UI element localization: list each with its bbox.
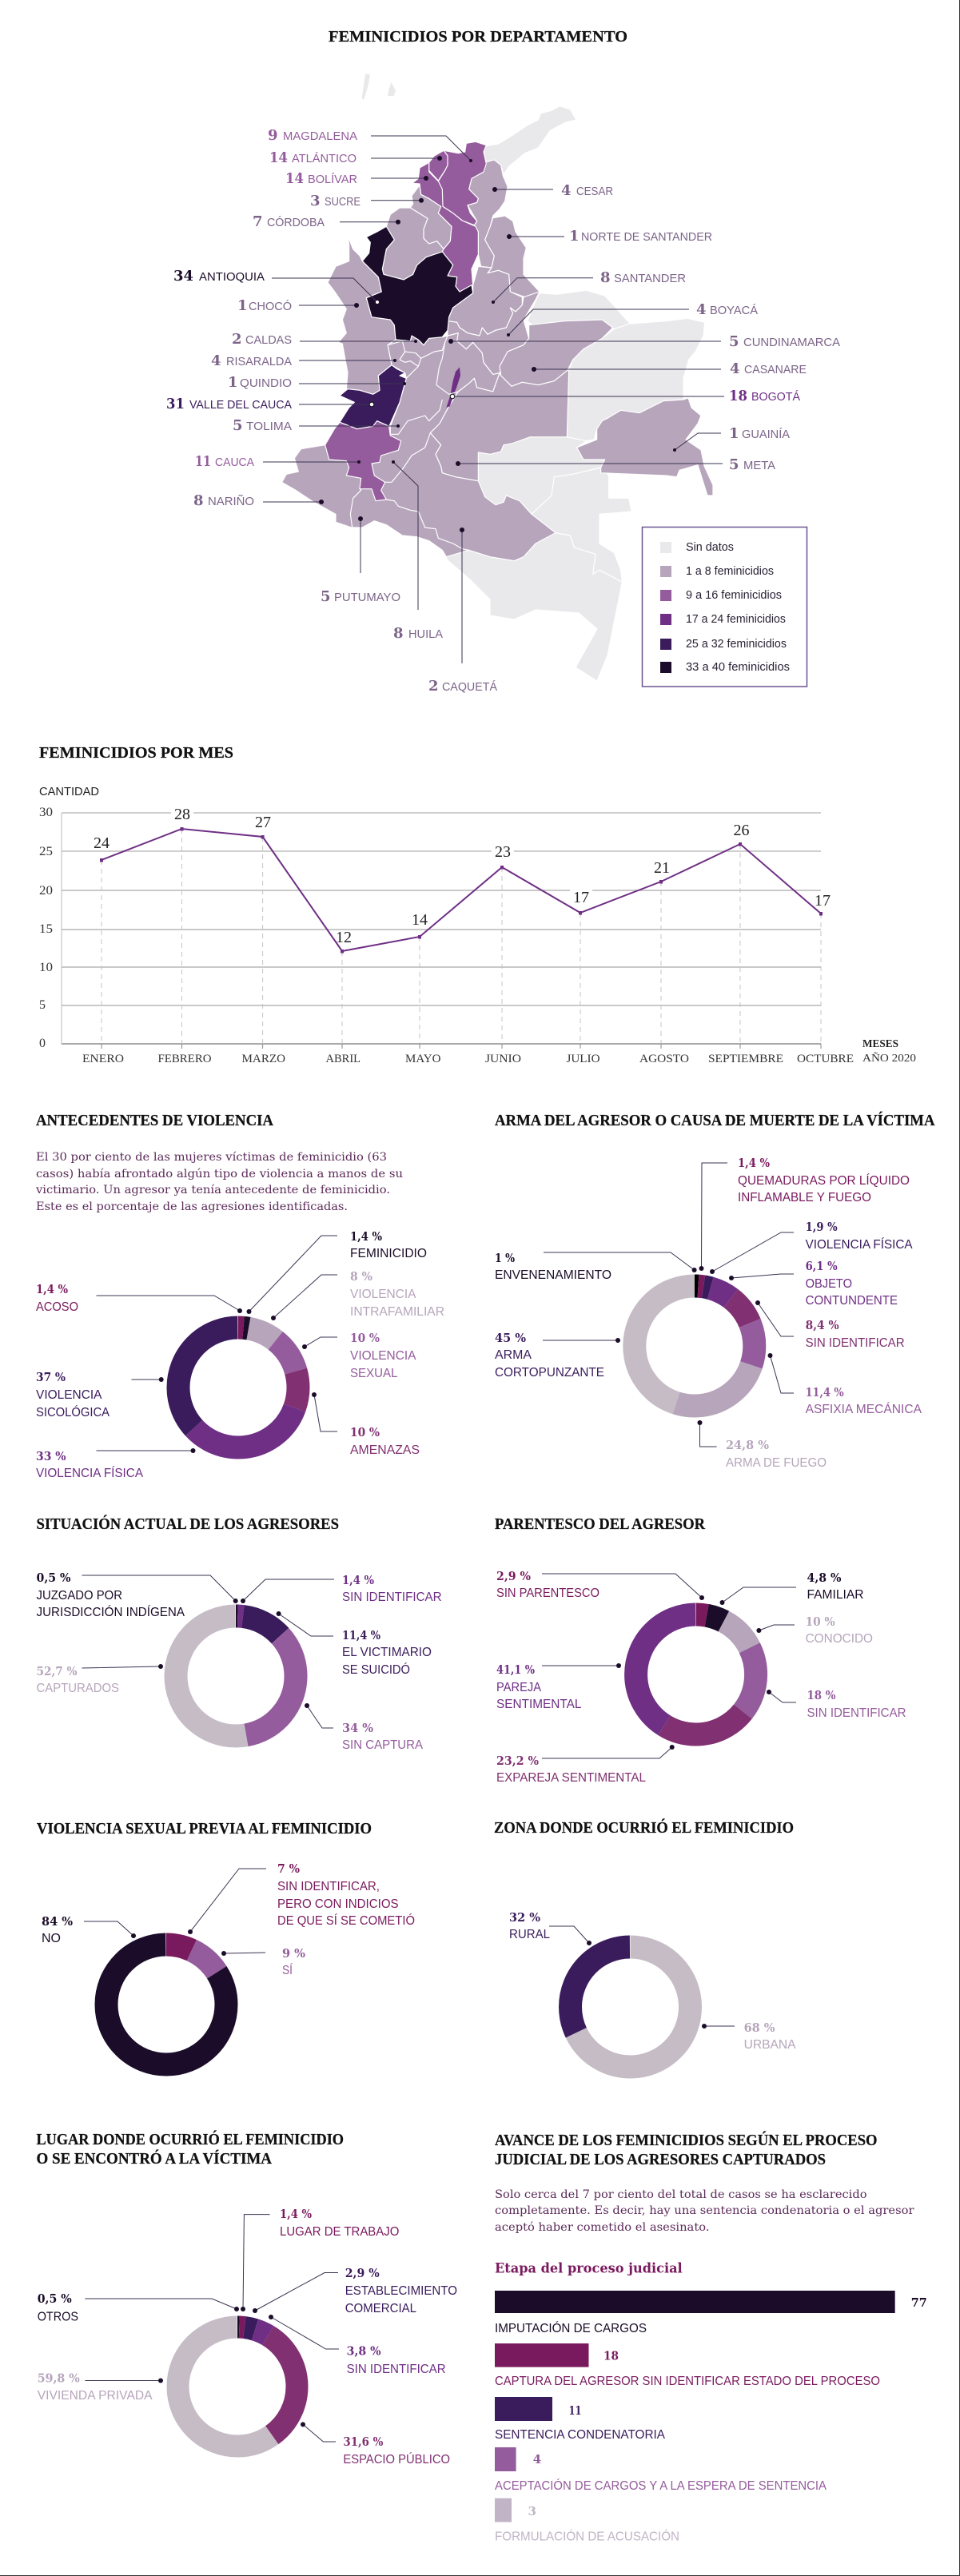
donut chart <box>177 2327 297 2446</box>
map labels: departments: CESAR <box>576 185 613 198</box>
intro paragraph: Solo cerca del 7 por ciento del total de casos se ha esclarecido <box>495 2188 866 2201</box>
callout: conocido <box>806 1614 873 1646</box>
callout: familiar: FAMILIAR <box>807 1588 863 1602</box>
map labels: departments: NARIÑO <box>208 495 254 508</box>
callout: violencia sicologica <box>36 1370 110 1419</box>
callout: jurisdiccion indigena: JURISDICCIÓN INDÍGENA <box>37 1604 185 1619</box>
map labels: departments: 18 <box>729 388 747 404</box>
callout: sin identificar: SIN IDENTIFICAR <box>347 2363 446 2376</box>
callout: sin identificar con indicios: 7 % <box>277 1861 300 1876</box>
callout: establecimiento comercial: COMERCIAL <box>345 2302 416 2315</box>
bar: sentencia condenatoria: SENTENCIA CONDENATORIA <box>495 2428 665 2442</box>
callout: sin parentesco: SIN PARENTESCO <box>496 1587 600 1600</box>
callout: violencia fisica: VIOLENCIA FÍSICA <box>806 1236 913 1252</box>
heading: monthly chart title: FEMINICIDIOS POR MES <box>39 744 233 762</box>
line chart: 28 <box>174 806 190 823</box>
map labels: departments: 31 <box>166 396 185 412</box>
callout: lugar de trabajo <box>280 2207 399 2239</box>
panel: zona donde ocurrio el feminicidio <box>494 1818 796 2067</box>
callout: espacio publico: ESPACIO PÚBLICO <box>343 2451 450 2467</box>
bar: formulacion de acusacion: FORMULACIÓN DE ACUSACIÓN <box>495 2529 679 2543</box>
callout: sin identificar <box>342 1573 442 1604</box>
callout: si: SÍ <box>282 1962 293 1977</box>
map labels: departments: 4 <box>696 301 707 318</box>
map leader lines <box>263 136 724 663</box>
heading: VIOLENCIA SEXUAL PREVIA AL FEMINICIDIO <box>37 1820 372 1837</box>
callout: acoso: ACOSO <box>36 1300 78 1314</box>
bar: captura del agresor <box>495 2343 880 2388</box>
callout: urbana: 68 % <box>744 2021 775 2035</box>
callout: violencia fisica <box>806 1220 913 1252</box>
map labels: departments: HUILA <box>408 627 443 641</box>
map labels: departments: BOYACÁ <box>710 304 758 317</box>
callout: feminicidio: 1,4 % <box>350 1229 382 1244</box>
bar: captura del agresor: CAPTURA DEL AGRESOR SIN IDENTIFICAR ESTADO DEL PROCESO <box>495 2375 880 2388</box>
map labels: departments: 14 <box>269 149 288 166</box>
panel: antecedentes de violencia <box>35 1112 444 1480</box>
map labels: departments: 8 <box>393 625 404 642</box>
callout: no <box>42 1914 73 1945</box>
callout: sin identificar: SIN IDENTIFICAR <box>342 1591 442 1604</box>
callout: sin identificar: 18 % <box>807 1688 836 1702</box>
line chart: 17 <box>815 892 831 910</box>
callout lines <box>543 1163 794 1447</box>
callout: sin identificar <box>347 2343 446 2376</box>
callout: conocido: CONOCIDO <box>806 1632 873 1646</box>
callout: conocido: 10 % <box>806 1614 835 1629</box>
callout: violencia fisica: 1,9 % <box>806 1220 838 1234</box>
callout: jurisdiccion indigena <box>37 1571 185 1619</box>
donut chart <box>636 1614 756 1734</box>
bar: aceptacion de cargos <box>495 2447 827 2493</box>
map legend: 1 a 8 feminicidios <box>686 565 774 578</box>
callout: lugar de trabajo: 1,4 % <box>280 2207 312 2221</box>
callout: establecimiento comercial <box>345 2266 457 2315</box>
map labels: departments: CÓRDOBA <box>267 216 325 229</box>
line chart: 26 <box>734 822 750 839</box>
map labels: departments: CALDAS <box>245 333 292 347</box>
bar: imputacion de cargos: IMPUTACIÓN DE CARGOS <box>495 2320 647 2335</box>
intro paragraph: aceptó haber cometido el asesinato. <box>495 2221 710 2234</box>
callout: capturados: CAPTURADOS <box>37 1682 119 1695</box>
line chart: 0 <box>39 1037 46 1050</box>
line chart: JUNIO <box>485 1053 521 1065</box>
map labels: departments: 3 <box>310 193 321 209</box>
intro paragraph <box>35 1151 403 1213</box>
callout: feminicidio <box>350 1229 427 1260</box>
callout: arma cortopunzante: CORTOPUNZANTE <box>495 1366 604 1380</box>
callout: quemaduras: INFLAMABLE Y FUEGO <box>738 1191 871 1204</box>
callout: espacio publico: 31,6 % <box>343 2435 383 2449</box>
callout lines <box>549 1926 735 2029</box>
heading: O SE ENCONTRÓ A LA VÍCTIMA <box>37 2148 273 2168</box>
callout: violencia sicologica: 37 % <box>36 1370 66 1384</box>
callout: violencia fisica: 33 % <box>36 1449 66 1463</box>
callout: feminicidio: FEMINICIDIO <box>350 1247 427 1260</box>
callout: amenazas <box>350 1425 420 1457</box>
line chart: SEPTIEMBRE <box>708 1053 783 1065</box>
bar: imputacion de cargos: 77 <box>911 2295 927 2310</box>
callout: expareja sentimental: EXPAREJA SENTIMENTAL <box>496 1771 646 1785</box>
callout: acoso <box>36 1282 78 1314</box>
heading: ZONA DONDE OCURRIÓ EL FEMINICIDIO <box>494 1818 794 1837</box>
callout: sin identificar: 3,8 % <box>347 2343 381 2358</box>
callout: pareja sentimental: PAREJA <box>496 1681 541 1694</box>
callout: asfixia mecanica: 11,4 % <box>806 1385 844 1399</box>
bar: aceptacion de cargos: 4 <box>533 2452 541 2467</box>
line chart: OCTUBRE <box>797 1053 854 1065</box>
map labels: departments: 2 <box>428 678 439 695</box>
callout lines <box>542 1574 796 1758</box>
callout: objeto contundente: OBJETO <box>806 1277 852 1291</box>
callout: arma cortopunzante <box>495 1331 604 1380</box>
map labels: departments: RISARALDA <box>226 355 292 368</box>
map labels: departments: 14 <box>285 170 304 187</box>
callout: jurisdiccion indigena: 0,5 % <box>37 1571 70 1585</box>
bar: aceptacion de cargos: ACEPTACIÓN DE CARGOS Y A LA ESPERA DE SENTENCIA <box>495 2478 827 2493</box>
map legend: 9 a 16 feminicidios <box>686 589 782 602</box>
heading <box>37 2129 344 2168</box>
map labels: departments: 7 <box>253 213 263 230</box>
callout: pareja sentimental: SENTIMENTAL <box>496 1698 581 1711</box>
line chart: 12 <box>336 929 352 946</box>
line chart: 17 <box>573 889 589 906</box>
callout: expareja sentimental <box>496 1754 646 1785</box>
donut chart <box>635 1286 755 1406</box>
callout: victimario se suicido: 11,4 % <box>342 1628 380 1642</box>
map labels: departments: 4 <box>730 360 740 377</box>
callout: vivienda privada: VIVIENDA PRIVADA <box>38 2389 153 2403</box>
map labels: departments: CAQUETÁ <box>442 680 497 694</box>
donut chart <box>176 1616 296 1736</box>
map labels: departments: 8 <box>193 492 204 509</box>
callout: sin identificar: 1,4 % <box>342 1573 374 1587</box>
heading: JUDICIAL DE LOS AGRESORES CAPTURADOS <box>495 2151 826 2168</box>
map labels: departments: BOGOTÁ <box>751 390 800 404</box>
callout: rural: RURAL <box>509 1928 550 1941</box>
intro paragraph: Este es el porcentaje de las agresiones identificadas. <box>36 1200 348 1213</box>
map labels: departments: 8 <box>600 269 611 286</box>
donut chart <box>106 1945 226 2064</box>
map labels: departments: SUCRE <box>325 195 360 209</box>
callout lines <box>85 2215 339 2442</box>
callout: objeto contundente: 6,1 % <box>806 1259 838 1273</box>
panel: situacion actual de los agresores <box>37 1514 442 1752</box>
heading: PARENTESCO DEL AGRESOR <box>495 1515 706 1533</box>
intro paragraph: casos) había afrontado algún tipo de violencia a manos de su <box>36 1168 403 1181</box>
callout: sin identificar <box>806 1318 905 1350</box>
map labels: departments: 34 <box>173 268 193 285</box>
callout: espacio publico <box>343 2435 450 2467</box>
line chart: 5 <box>39 998 46 1012</box>
line chart: AÑO 2020 <box>862 1052 916 1065</box>
intro paragraph: completamente. Es decir, hay una sentencia condenatoria o el agresor <box>495 2204 914 2217</box>
map labels: departments: 5 <box>729 456 739 473</box>
line chart: 15 <box>39 922 53 936</box>
callout: violencia sexual: SEXUAL <box>350 1367 398 1380</box>
callout: expareja sentimental: 23,2 % <box>496 1754 539 1768</box>
line chart: 25 <box>39 845 53 858</box>
callout: violencia fisica <box>36 1449 143 1480</box>
map labels: departments: META <box>743 459 775 472</box>
callout: capturados: 52,7 % <box>37 1664 77 1678</box>
callout: asfixia mecanica <box>806 1385 922 1416</box>
bar: captura del agresor: 18 <box>603 2349 619 2363</box>
callout: capturados <box>37 1664 119 1695</box>
callout: otros: 0,5 % <box>38 2291 72 2306</box>
callout: establecimiento comercial: 2,9 % <box>345 2266 380 2280</box>
line chart <box>39 806 916 1065</box>
heading: SITUACIÓN ACTUAL DE LOS AGRESORES <box>37 1514 339 1533</box>
map labels: departments: PUTUMAYO <box>334 591 400 604</box>
callout lines <box>84 1869 266 1956</box>
callout: acoso: 1,4 % <box>36 1282 68 1296</box>
intro paragraph: victimario. Un agresor ya tenía antecedente de feminicidio. <box>35 1184 390 1196</box>
map labels: departments: CHOCÓ <box>249 300 292 313</box>
callout: sin identificar: SIN IDENTIFICAR <box>806 1336 905 1350</box>
callout: sin identificar: 8,4 % <box>806 1318 839 1332</box>
map labels: departments: VALLE DEL CAUCA <box>189 398 292 412</box>
callout: sin identificar <box>807 1688 906 1720</box>
map labels: departments: 2 <box>232 331 242 348</box>
callout: sin identificar con indicios: DE QUE SÍ SE COMETIÓ <box>277 1913 415 1928</box>
panel: avance de los feminicidios <box>495 2130 927 2543</box>
panel: feminicidios por mes <box>39 744 916 1065</box>
map labels: departments: BOLÍVAR <box>308 173 357 186</box>
map legend: 33 a 40 feminicidios <box>686 661 790 674</box>
map labels: departments: 9 <box>268 127 278 144</box>
callout: otros: OTROS <box>38 2310 78 2323</box>
callout: objeto contundente: CONTUNDENTE <box>806 1294 898 1308</box>
callout: asfixia mecanica: ASFIXIA MECÁNICA <box>806 1401 922 1416</box>
heading: AVANCE DE LOS FEMINICIDIOS SEGÚN EL PROCESO <box>495 2130 878 2149</box>
line chart: 14 <box>412 911 428 929</box>
map labels: departments: MAGDALENA <box>283 129 357 143</box>
callout: arma de fuego <box>726 1438 827 1470</box>
map labels: departments: SANTANDER <box>614 272 686 285</box>
map legend: 17 a 24 feminicidios <box>686 613 786 626</box>
bar: sentencia condenatoria <box>495 2397 665 2442</box>
callout: arma de fuego: ARMA DE FUEGO <box>726 1456 827 1470</box>
map labels: departments: CUNDINAMARCA <box>743 336 840 349</box>
panel: lugar donde ocurrio el feminicidio <box>37 2129 457 2467</box>
callout: quemaduras: QUEMADURAS POR LÍQUIDO <box>738 1173 910 1188</box>
callout: pareja sentimental <box>496 1662 581 1711</box>
line chart: ABRIL <box>326 1053 360 1065</box>
callout: quemaduras: 1,4 % <box>738 1156 770 1170</box>
donut chart <box>178 1328 298 1447</box>
callout: sin captura <box>342 1721 423 1752</box>
line chart: MAYO <box>405 1053 441 1065</box>
map legend <box>643 528 807 687</box>
callout: violencia sexual: 10 % <box>350 1331 380 1345</box>
callout: victimario se suicido: EL VICTIMARIO <box>342 1646 432 1659</box>
line chart: 10 <box>39 961 53 974</box>
bar: formulacion de acusacion <box>495 2498 679 2543</box>
map labels: departments: 5 <box>321 588 331 605</box>
donut chart <box>571 1947 691 2067</box>
bar: imputacion de cargos <box>495 2291 927 2335</box>
callout: rural <box>509 1910 550 1941</box>
callout: quemaduras <box>738 1156 910 1204</box>
panel: feminicidios por departamento <box>166 28 840 695</box>
callout: lugar de trabajo: LUGAR DE TRABAJO <box>280 2225 399 2239</box>
line chart: MESES <box>862 1038 898 1050</box>
map labels: departments: QUINDIO <box>240 376 292 390</box>
callout: vivienda privada <box>38 2371 153 2403</box>
map labels: departments: ANTIOQUIA <box>199 270 265 284</box>
line chart: 27 <box>255 814 271 831</box>
callout: sin identificar con indicios <box>277 1861 415 1928</box>
map labels: departments: 11 <box>195 453 211 470</box>
heading: ARMA DEL AGRESOR O CAUSA DE MUERTE DE LA VÍCTIMA <box>495 1111 935 1129</box>
callout: violencia sicologica: VIOLENCIA <box>36 1388 102 1402</box>
map labels: departments: 1 <box>729 425 739 442</box>
map labels: departments <box>166 127 840 695</box>
callout: violencia sicologica: SICOLÓGICA <box>36 1404 110 1419</box>
map labels: departments: TOLIMA <box>246 420 292 433</box>
callout: violencia intrafamiliar: 8 % <box>350 1269 372 1284</box>
callout: familiar <box>807 1571 863 1602</box>
line chart: 23 <box>495 843 511 861</box>
map labels: departments: 1 <box>237 297 248 314</box>
callout: familiar: 4,8 % <box>807 1571 841 1585</box>
callout: amenazas: 10 % <box>350 1425 380 1439</box>
line chart: JULIO <box>566 1053 600 1065</box>
map labels: departments: 5 <box>729 333 739 350</box>
callout: arma cortopunzante: ARMA <box>495 1348 532 1362</box>
line chart: ENERO <box>82 1053 124 1065</box>
map labels: departments: ATLÁNTICO <box>292 152 357 165</box>
line chart: 20 <box>39 884 53 898</box>
callout: sin parentesco: 2,9 % <box>496 1569 531 1583</box>
map labels: departments: GUAINÍA <box>742 428 790 441</box>
bar: formulacion de acusacion: 3 <box>528 2504 536 2518</box>
callout: pareja sentimental: 41,1 % <box>496 1662 535 1677</box>
line chart: FEBRERO <box>158 1053 212 1065</box>
choropleth map of Colombia <box>282 74 713 681</box>
callout: victimario se suicido <box>342 1628 432 1677</box>
panel: arma del agresor <box>495 1111 935 1470</box>
callout: si <box>282 1946 305 1977</box>
line chart: AGOSTO <box>639 1053 689 1065</box>
callout: envenenamiento: 1 % <box>495 1251 515 1265</box>
callout: violencia intrafamiliar <box>350 1269 444 1319</box>
callout: violencia intrafamiliar: VIOLENCIA <box>350 1288 416 1301</box>
y axis title: CANTIDAD <box>39 785 99 798</box>
callout: no: NO <box>42 1932 61 1945</box>
intro paragraph: El 30 por ciento de las mujeres víctimas de feminicidio (63 <box>36 1151 387 1164</box>
callout: violencia sexual <box>350 1331 416 1380</box>
callout: sin identificar con indicios: SIN IDENTIFICAR, <box>277 1880 380 1893</box>
map labels: departments: 5 <box>233 417 243 434</box>
line chart: 30 <box>39 806 53 819</box>
map labels: departments: CAUCA <box>215 456 254 469</box>
callout: amenazas: AMENAZAS <box>350 1443 420 1457</box>
line chart: MARZO <box>241 1053 285 1065</box>
heading: map title: FEMINICIDIOS POR DEPARTAMENTO <box>329 28 627 46</box>
callout: establecimiento comercial: ESTABLECIMIENTO <box>345 2284 457 2298</box>
map legend: 25 a 32 feminicidios <box>686 638 787 651</box>
map labels: departments: CASANARE <box>744 363 807 376</box>
map legend: Sin datos <box>686 541 734 554</box>
callout: rural: 32 % <box>509 1910 540 1925</box>
panel: parentesco del agresor <box>495 1515 906 1785</box>
heading: LUGAR DONDE OCURRIÓ EL FEMINICIDIO <box>37 2129 344 2148</box>
map labels: departments: 1 <box>569 228 580 245</box>
map labels: departments: 4 <box>561 182 572 199</box>
callout: sin identificar con indicios: PERO CON INDICIOS <box>277 1897 399 1911</box>
map labels: departments: 4 <box>211 352 221 369</box>
callout: violencia fisica: VIOLENCIA FÍSICA <box>36 1465 143 1480</box>
callout: urbana: URBANA <box>744 2038 796 2052</box>
callout: sin identificar: SIN IDENTIFICAR <box>807 1706 906 1720</box>
callout: sin parentesco <box>496 1569 600 1600</box>
callout: arma de fuego: 24,8 % <box>726 1438 769 1452</box>
callout lines <box>96 1236 337 1453</box>
heading <box>495 2130 878 2168</box>
callout lines <box>82 1575 334 1728</box>
callout: violencia intrafamiliar: INTRAFAMILIAR <box>350 1305 444 1319</box>
callout: arma cortopunzante: 45 % <box>495 1331 526 1345</box>
callout: urbana <box>744 2021 796 2052</box>
callout: vivienda privada: 59,8 % <box>38 2371 80 2386</box>
callout: violencia sexual: VIOLENCIA <box>350 1349 416 1363</box>
callout: si: 9 % <box>282 1946 305 1961</box>
line chart: 24 <box>94 834 110 852</box>
callout: envenenamiento <box>495 1251 611 1282</box>
callout: otros <box>38 2291 78 2323</box>
callout: victimario se suicido: SE SUICIDÓ <box>342 1662 410 1677</box>
callout: objeto contundente <box>806 1259 898 1308</box>
map labels: departments: 1 <box>228 374 238 391</box>
panel: violencia sexual previa <box>37 1820 415 2064</box>
map labels: departments: NORTE DE SANTANDER <box>581 230 712 244</box>
subheading: Etapa del proceso judicial <box>495 2260 683 2276</box>
line chart: 21 <box>654 859 670 877</box>
callout: sin captura: 34 % <box>342 1721 373 1735</box>
callout: envenenamiento: ENVENENAMIENTO <box>495 1268 611 1282</box>
callout: jurisdiccion indigena: JUZGADO POR <box>37 1589 122 1603</box>
heading: ANTECEDENTES DE VIOLENCIA <box>36 1112 274 1129</box>
callout: sin captura: SIN CAPTURA <box>342 1738 423 1752</box>
bar: sentencia condenatoria: 11 <box>569 2403 582 2418</box>
callout: no: 84 % <box>42 1914 73 1929</box>
intro paragraph <box>495 2188 914 2234</box>
